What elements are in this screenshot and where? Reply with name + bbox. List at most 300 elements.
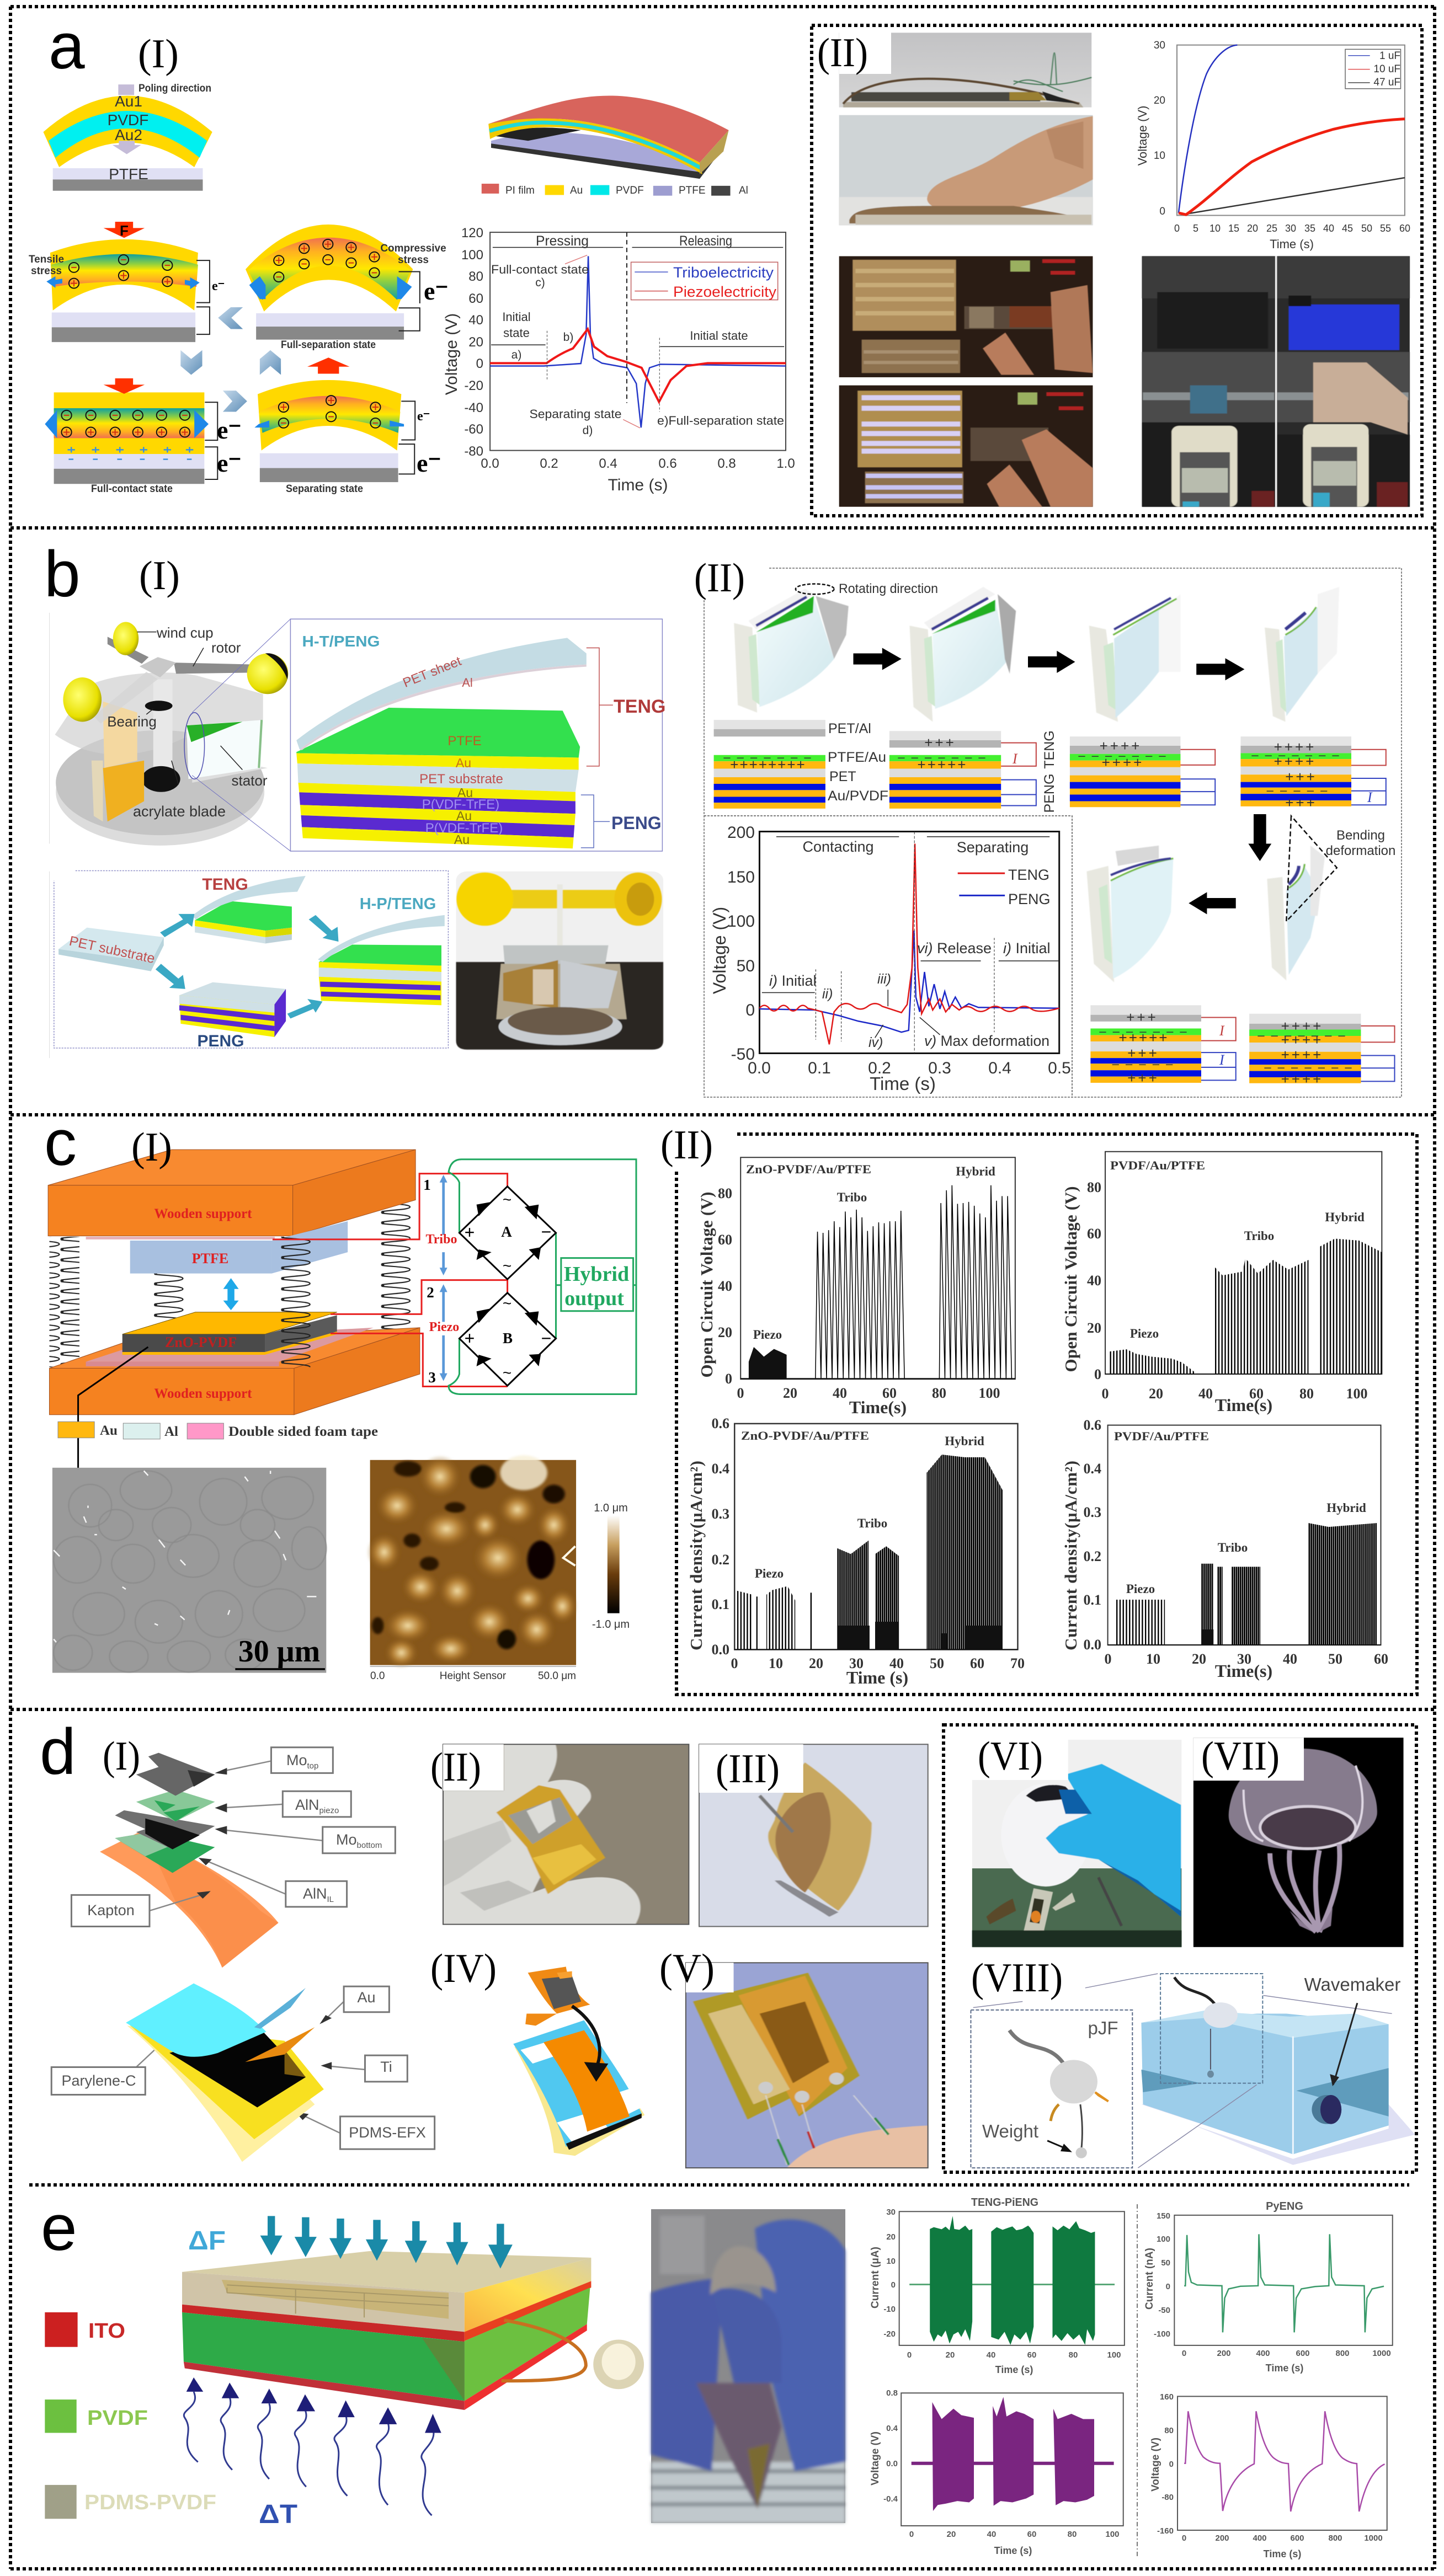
chart: PyENG voltage: 160 (1160, 2392, 1174, 2402)
layer stacks with charge states: +++ (1127, 1070, 1159, 1086)
chart: voltage vs time: Triboelectricity (673, 264, 774, 281)
chart: TENG-PiENG current: Current (μA) (870, 2247, 881, 2308)
chart: TENG-PiENG voltage: 0.8 (886, 2388, 898, 2398)
chart: TENG and PENG voltage: v) Max deformation (924, 1033, 1049, 1049)
layered cube with force and heat arrows: ΔF (188, 2226, 226, 2256)
hybrid device schematic: − (541, 1328, 551, 1348)
chart: PyENG voltage: Time (s) (1264, 2548, 1301, 2559)
chart: open circuit voltage PVDF: 80 (1087, 1179, 1101, 1195)
fabrication flow: TENG (202, 875, 248, 894)
chart: current density ZnO-PVDF: Time (s) (846, 1668, 908, 1687)
photo: arched device (839, 33, 1091, 108)
illustration d(VIII): wave tank and pJF inset: Weight (982, 2121, 1038, 2141)
hybrid device schematic: 3 (428, 1369, 436, 1386)
hybrid device schematic: Wooden support (154, 1206, 252, 1221)
layer stacks with charge states: I (1219, 1052, 1225, 1068)
photo: LEDs on (839, 386, 1093, 507)
hybrid device schematic: output (564, 1287, 624, 1310)
layer stacks with charge states: – – – – – – – (723, 750, 813, 764)
chart: TENG-PiENG voltage: 0 (909, 2530, 914, 2539)
chart: PyENG current: 0 (1182, 2349, 1186, 2358)
layer stack diagram: Au1 (115, 93, 142, 110)
chart: open circuit voltage PVDF: Open Circuit Voltage (V) (1061, 1186, 1080, 1372)
chart: open circuit voltage ZnO-PVDF: ZnO-PVDF/Au/PTFE (746, 1162, 871, 1176)
chart: open circuit voltage PVDF: 0 (1094, 1366, 1101, 1382)
AFM image with colour scale: -1.0 μm (592, 1618, 630, 1631)
hybrid device schematic: Double sided foam tape (228, 1424, 378, 1439)
panel b(II) (694, 555, 1402, 1097)
label: b(II): (II) (694, 555, 745, 601)
chart: TENG-PiENG voltage: -0.4 (883, 2494, 898, 2504)
H-T/PENG zoomed layer stack: P(VDF-TrFE) (425, 821, 503, 836)
wind turbine schematic: wind cup (156, 624, 214, 641)
chart: current density ZnO-PVDF: ZnO-PVDF/Au/PTFE (741, 1429, 869, 1442)
frame of b(II) (704, 568, 1402, 1097)
chart: current density PVDF: Hybrid (1326, 1501, 1366, 1515)
chart: voltage vs time: Initial (502, 310, 531, 324)
layer stacks with charge states: – – – – – – – (1257, 1028, 1347, 1042)
layer stacks with charge states: ++++ (1102, 754, 1144, 771)
AFM image with colour scale: 0.0 (370, 1670, 385, 1682)
exploded AlN layers on Kapton: AlN (303, 1885, 327, 1902)
chart: open circuit voltage PVDF: 60 (1087, 1226, 1101, 1242)
chart: capacitor charging: Voltage (V) (1136, 106, 1149, 165)
chart: open circuit voltage ZnO-PVDF: Time(s) (849, 1397, 907, 1417)
chart: capacitor charging: 1 uF (1379, 50, 1400, 62)
panel d right group (971, 1734, 1415, 2168)
chart: current density ZnO-PVDF: 40 (889, 1655, 904, 1671)
illustration d(IV): patch assembly (430, 1946, 644, 2156)
photo d(V): device on skin: (V) (659, 1946, 715, 1991)
exploded AlN layers on Kapton (51, 1747, 435, 2162)
chart: PyENG current: -50 (1158, 2306, 1170, 2315)
chart: open circuit voltage ZnO-PVDF: Open Circuit Voltage (V) (697, 1191, 716, 1378)
chart: PyENG current: PyENG (1266, 2200, 1303, 2212)
chart: open circuit voltage ZnO-PVDF: 0 (737, 1385, 744, 1401)
chart: current density PVDF: Tribo (1218, 1541, 1248, 1554)
chart: PyENG voltage: 0 (1169, 2460, 1174, 2469)
chart: open circuit voltage ZnO-PVDF: 0 (725, 1371, 732, 1387)
chart: current density PVDF: 40 (1283, 1651, 1297, 1667)
chart: TENG and PENG voltage: i) Initial (769, 972, 817, 989)
hybrid device schematic: ~ (503, 1295, 511, 1312)
fabrication flow (50, 870, 448, 1058)
chart: voltage vs time: 60 (468, 291, 483, 306)
chart: TENG and PENG voltage: 0.2 (868, 1059, 891, 1077)
chart: voltage vs time: -60 (464, 422, 483, 437)
exploded AlN layers on Kapton: bottom (357, 1841, 382, 1850)
chart: current density ZnO-PVDF: 0.1 (712, 1596, 729, 1612)
chart: PyENG current: 150 (1157, 2211, 1170, 2221)
chart: voltage vs time: Separating state (530, 407, 621, 421)
chart: PyENG voltage: 600 (1290, 2534, 1304, 2543)
layer stacks with charge states: I (1012, 751, 1018, 767)
layer stacks with charge states: TENG (1042, 730, 1057, 769)
chart: TENG and PENG voltage: Voltage (V) (710, 907, 729, 994)
exploded AlN layers on Kapton: Ti (380, 2059, 392, 2075)
chart: PyENG current: 50 (1161, 2258, 1170, 2268)
chart: voltage vs time: 0.6 (658, 456, 677, 471)
chart: PyENG voltage: -80 (1161, 2493, 1174, 2502)
H-T/PENG zoomed layer stack: Au (454, 832, 470, 847)
label: d(I): (I) (103, 1734, 140, 1779)
chart: voltage vs time: 80 (468, 269, 483, 284)
chart: open circuit voltage ZnO-PVDF: 20 (718, 1324, 732, 1340)
panel c(II) (660, 1123, 1388, 1687)
AFM image with colour scale: Height Sensor (440, 1670, 507, 1682)
chart: TENG and PENG voltage: 0.0 (748, 1059, 771, 1077)
rotating vane sequence: Bending (1336, 828, 1385, 843)
layer stack diagram: Au2 (115, 126, 142, 143)
hybrid device schematic: Au (100, 1423, 118, 1438)
working cycle diagrams: F (120, 222, 129, 239)
chart: open circuit voltage PVDF: Hybrid (1325, 1210, 1365, 1224)
panel e (41, 2192, 1393, 2559)
illustration d(VIII): wave tank and pJF inset: (VIII) (971, 1955, 1063, 2001)
layer stacks with charge states: – – – – – – – (1099, 1024, 1189, 1038)
chart: PyENG voltage: 400 (1253, 2534, 1267, 2543)
layer stacks with charge states: +++ (1126, 1009, 1158, 1025)
chart: capacitor charging: 40 (1323, 223, 1334, 234)
chart: voltage vs time: b) (563, 331, 573, 344)
chart: TENG-PiENG voltage: 20 (947, 2530, 956, 2539)
chart: open circuit voltage PVDF: 0 (1101, 1386, 1109, 1402)
chart: PyENG current: 0 (1166, 2282, 1170, 2291)
chart: PyENG current: 1000 (1372, 2349, 1391, 2358)
chart: TENG-PiENG voltage: 0.0 (886, 2459, 898, 2468)
chart: TENG-PiENG current: 20 (886, 2232, 896, 2242)
chart: TENG-PiENG voltage: 100 (1105, 2530, 1120, 2539)
photo d(VII): jellyfish (1193, 1734, 1404, 1947)
chart: TENG and PENG voltage: 0.4 (988, 1059, 1011, 1077)
chart: current density ZnO-PVDF: Tribo (857, 1516, 887, 1530)
layer stacks with charge states: – – – – – – – (898, 750, 987, 764)
hybrid device schematic: Piezo (429, 1320, 459, 1334)
chart: TENG-PiENG current: TENG-PiENG (971, 2196, 1038, 2209)
chart: current density ZnO-PVDF: 30 (849, 1655, 864, 1671)
chart: TENG and PENG voltage (704, 816, 1072, 1097)
chart: PyENG current: 600 (1296, 2349, 1310, 2358)
layer stacks with charge states: ++++ (1281, 1032, 1323, 1048)
chart: open circuit voltage ZnO-PVDF: 80 (718, 1185, 732, 1201)
chart: open circuit voltage ZnO-PVDF: Piezo (753, 1328, 782, 1342)
chart: voltage vs time: Initial state (690, 329, 748, 343)
H-T/PENG zoomed layer stack (290, 619, 665, 851)
chart: TENG-PiENG current: 60 (1027, 2350, 1036, 2360)
chart: current density PVDF: 0.0 (1084, 1637, 1101, 1653)
chart: voltage vs time: 120 (461, 226, 483, 241)
label: c(I): (I) (131, 1125, 172, 1170)
working cycle diagrams: Full-contact state (91, 483, 173, 495)
illustration d(VIII): wave tank and pJF inset: Wavemaker (1304, 1974, 1400, 1995)
rotating vane sequence (734, 581, 1395, 982)
photo d(V): device on skin (659, 1946, 928, 2168)
chart: TENG and PENG voltage: TENG (1008, 867, 1049, 883)
chart: TENG and PENG voltage: 100 (727, 912, 755, 931)
H-T/PENG zoomed layer stack: PTFE (447, 734, 482, 749)
chart: open circuit voltage PVDF: Time(s) (1215, 1395, 1272, 1415)
chart: current density PVDF: 0.6 (1084, 1417, 1101, 1433)
working cycle diagrams (29, 222, 449, 495)
chart: TENG-PiENG current: 20 (946, 2350, 955, 2360)
chart: open circuit voltage ZnO-PVDF: Tribo (837, 1190, 867, 1204)
chart: voltage vs time: e)Full-separation state (657, 414, 784, 427)
chart: voltage vs time: Piezoelectricity (673, 284, 777, 300)
photo: turbine prototype (456, 872, 663, 1050)
chart: TENG-PiENG current (870, 2196, 1125, 2375)
hybrid device schematic: Wooden support (154, 1386, 252, 1401)
photo: display panel before and after (1142, 256, 1410, 507)
chart: voltage vs time: 0.8 (717, 456, 736, 471)
layer stacks with charge states: ++++ (1274, 753, 1316, 769)
exploded AlN layers on Kapton: Parylene-C (61, 2072, 136, 2089)
layer stacks with charge states: ++++ (1281, 1018, 1323, 1034)
panel a (29, 10, 795, 495)
label: b(I): (I) (139, 553, 180, 598)
material legend: PVDF (87, 2407, 148, 2430)
chart: TENG-PiENG current: 0 (891, 2280, 896, 2290)
chart: TENG and PENG voltage: 50 (737, 957, 755, 975)
chart: open circuit voltage PVDF: Tribo (1244, 1229, 1274, 1243)
chart: TENG and PENG voltage: 0.5 (1048, 1059, 1071, 1077)
chart: capacitor charging: 10 (1209, 223, 1221, 234)
chart: PyENG voltage: 200 (1215, 2534, 1229, 2543)
chart: TENG and PENG voltage: i) Initial (1003, 940, 1051, 956)
chart: open circuit voltage PVDF: 20 (1149, 1386, 1163, 1402)
chart: PyENG current: 100 (1157, 2235, 1170, 2244)
chart: current density ZnO-PVDF: 0.6 (712, 1415, 729, 1431)
chart: TENG-PiENG current: 30 (886, 2208, 896, 2217)
photo: LEDs off (839, 256, 1093, 377)
wind turbine schematic: rotor (211, 639, 241, 656)
chart: open circuit voltage PVDF: 100 (1346, 1386, 1367, 1402)
working cycle diagrams: stress (398, 254, 429, 266)
chart: open circuit voltage PVDF: 20 (1087, 1320, 1101, 1336)
chart: capacitor charging: 30 (1285, 223, 1296, 234)
illustration d(VIII): wave tank and pJF inset (971, 1955, 1415, 2168)
chart: open circuit voltage ZnO-PVDF: 40 (718, 1278, 732, 1294)
chart: current density PVDF: 0.4 (1084, 1461, 1101, 1477)
chart: current density ZnO-PVDF: 0.4 (712, 1461, 729, 1477)
chart: PyENG current (1144, 2200, 1393, 2374)
3D device with legend: PVDF (616, 185, 644, 196)
hybrid device schematic: ~ (503, 1191, 511, 1208)
layer stacks with charge states: I (1219, 1023, 1225, 1039)
label: a(II): (II) (817, 30, 868, 76)
layer stacks with charge states: – – – – – – – (1264, 1060, 1354, 1074)
chart: current density PVDF: 10 (1146, 1651, 1160, 1667)
layer stacks with charge states: PET/Al (828, 721, 871, 736)
chart: TENG and PENG voltage: vi) Release (917, 940, 992, 956)
fabrication flow: H-P/TENG (360, 895, 436, 913)
chart: open circuit voltage PVDF: 40 (1198, 1386, 1213, 1402)
chart: current density ZnO-PVDF: 0 (731, 1655, 738, 1671)
chart: PyENG voltage: 0 (1182, 2534, 1186, 2543)
chart: open circuit voltage PVDF: Piezo (1130, 1327, 1159, 1340)
chart: TENG-PiENG current: 100 (1107, 2350, 1121, 2360)
H-T/PENG zoomed layer stack: Au (457, 785, 473, 800)
chart: capacitor charging: 0 (1159, 206, 1165, 217)
chart: voltage vs time: 1.0 (776, 456, 795, 471)
layer stacks with charge states: ++++ (1100, 737, 1142, 754)
chart divider (1137, 2204, 1138, 2557)
chart: voltage vs time: 20 (468, 335, 483, 350)
photo d(VI): jellyfish robot held by glove (972, 1734, 1181, 1947)
photo d(VI): jellyfish robot held by glove: (VI) (978, 1734, 1043, 1779)
chart: open circuit voltage PVDF: 60 (1249, 1386, 1264, 1402)
H-T/PENG zoomed layer stack: Au (456, 809, 472, 823)
chart: capacitor charging: 30 (1154, 40, 1165, 51)
working cycle diagrams: e⁻ (417, 449, 441, 477)
chart: voltage vs time: c) (535, 276, 545, 289)
chart: open circuit voltage PVDF: 40 (1087, 1273, 1101, 1289)
working cycle diagrams: e⁻ (217, 449, 242, 477)
chart: voltage vs time: Releasing (679, 233, 732, 249)
chart: TENG and PENG voltage: ii) (822, 986, 833, 1002)
chart: capacitor charging: 5 (1193, 223, 1198, 234)
working cycle diagrams: e⁻ (217, 416, 242, 444)
hybrid device schematic (48, 1150, 636, 1496)
chart: open circuit voltage ZnO-PVDF (697, 1157, 1015, 1417)
layer stacks with charge states: PTFE/Au (828, 750, 886, 765)
layer stacks with charge states: PENG (1042, 774, 1057, 813)
hybrid device schematic: ZnO-PVDF (165, 1334, 237, 1350)
layer stacks with charge states: +++ (1127, 1045, 1159, 1061)
layer stacks with charge states (714, 720, 1394, 1087)
H-T/PENG zoomed layer stack: PENG (611, 813, 662, 833)
working cycle diagrams: e⁻ (417, 409, 430, 424)
material legend: ITO (88, 2320, 125, 2343)
chart: current density ZnO-PVDF: 0.0 (712, 1642, 729, 1658)
photo d(II): flexible device in gloved hand: (II) (430, 1745, 481, 1790)
chart: TENG and PENG voltage: iii) (877, 971, 891, 987)
chart: PyENG current: -100 (1154, 2329, 1170, 2339)
chart: open circuit voltage ZnO-PVDF: 100 (979, 1385, 1000, 1401)
chart: TENG-PiENG current: 10 (886, 2257, 896, 2266)
chart: capacitor charging (1136, 40, 1410, 251)
layer stack diagram: Poling direction (138, 83, 211, 94)
chart: voltage vs time: Full-contact state (491, 263, 589, 276)
AFM image with colour scale: 50.0 μm (538, 1670, 576, 1682)
exploded AlN layers on Kapton: IL (327, 1895, 334, 1904)
chart: PyENG voltage: Voltage (V) (1150, 2438, 1161, 2492)
H-T/PENG zoomed layer stack: Al (462, 676, 473, 690)
layer stacks with charge states: – – – – – (1267, 783, 1329, 797)
chart: capacitor charging: 10 (1154, 150, 1165, 162)
hybrid device schematic: − (541, 1222, 551, 1242)
photo d(III): gold foil with tweezers: (III) (716, 1746, 780, 1792)
chart: current density ZnO-PVDF: 70 (1010, 1655, 1025, 1671)
chart: voltage vs time (443, 226, 795, 494)
chart: capacitor charging: 35 (1304, 223, 1315, 234)
exploded AlN layers on Kapton: Mo (336, 1831, 357, 1848)
chart: capacitor charging: 45 (1342, 223, 1353, 234)
chart: PyENG voltage (1150, 2392, 1387, 2559)
chart: current density ZnO-PVDF: 0.3 (712, 1506, 729, 1522)
chart: voltage vs time: a) (511, 349, 521, 361)
H-T/PENG zoomed layer stack: H-T/PENG (302, 633, 380, 650)
exploded AlN layers on Kapton: Au (357, 1989, 376, 2006)
hybrid device schematic: ~ (503, 1364, 511, 1381)
layer stacks with charge states: – – – – – – – (1251, 748, 1341, 762)
H-T/PENG zoomed layer stack: TENG (614, 696, 665, 717)
chart: voltage vs time: 40 (468, 313, 483, 328)
chart: capacitor charging: Time (s) (1270, 237, 1314, 251)
chart: TENG-PiENG current: 40 (987, 2350, 995, 2360)
chart: TENG-PiENG voltage: 60 (1027, 2530, 1036, 2539)
chart: capacitor charging: 47 uF (1373, 77, 1400, 88)
chart: open circuit voltage ZnO-PVDF: 60 (882, 1385, 897, 1401)
working cycle diagrams: Separating state (286, 483, 363, 495)
chart: PyENG voltage: -160 (1157, 2526, 1174, 2536)
chart: TENG and PENG voltage: iv) (868, 1035, 883, 1050)
heading: b: b (44, 538, 81, 611)
chart: voltage vs time: Time (s) (608, 476, 668, 494)
chart: TENG-PiENG voltage: 0.4 (886, 2424, 898, 2433)
chart: capacitor charging: 15 (1228, 223, 1239, 234)
illustration d(IV): patch assembly: (IV) (430, 1946, 497, 1991)
chart: PyENG current: 800 (1335, 2349, 1350, 2358)
chart: open circuit voltage ZnO-PVDF: 60 (718, 1232, 732, 1248)
layer stacks with charge states: – – – – – – – (1078, 749, 1168, 762)
chart: TENG-PiENG current: 0 (907, 2350, 912, 2360)
chart: TENG and PENG voltage: 0.3 (928, 1059, 951, 1077)
3D device with legend (482, 95, 748, 196)
hybrid device schematic: B (503, 1330, 513, 1346)
chart: current density ZnO-PVDF: Current density(μA/cm²) (686, 1461, 706, 1650)
chart: voltage vs time: state (503, 326, 530, 340)
wind turbine schematic: acrylate blade (133, 803, 226, 820)
chart: TENG and PENG voltage: 150 (727, 868, 755, 886)
hybrid device schematic: Al (164, 1424, 178, 1439)
chart: PyENG current: Current (nA) (1144, 2248, 1155, 2310)
H-T/PENG zoomed layer stack: P(VDF-TrFE) (422, 797, 499, 812)
layer stack diagram (43, 83, 212, 191)
chart: current density ZnO-PVDF: 10 (769, 1655, 783, 1671)
chart: TENG-PiENG current: -10 (883, 2305, 896, 2314)
layered cube with force and heat arrows (182, 2216, 644, 2529)
exploded AlN layers on Kapton: piezo (319, 1806, 339, 1815)
chart: open circuit voltage ZnO-PVDF: 40 (833, 1385, 847, 1401)
chart: capacitor charging: 20 (1247, 223, 1258, 234)
panel b (44, 538, 665, 1058)
H-T/PENG zoomed layer stack: Au (456, 756, 471, 770)
chart: TENG and PENG voltage: 200 (727, 824, 755, 842)
chart: current density PVDF: 0.3 (1084, 1504, 1101, 1520)
chart: current density PVDF: Current density(μA/cm²) (1061, 1461, 1080, 1650)
chart: current density ZnO-PVDF: 50 (930, 1655, 944, 1671)
layer stacks with charge states: Au/PVDF (828, 788, 888, 804)
chart: current density PVDF: 50 (1328, 1651, 1342, 1667)
chart: current density PVDF: 60 (1374, 1651, 1388, 1667)
hybrid device schematic: ~ (503, 1257, 511, 1274)
fabrication flow: PET substrate (68, 933, 156, 966)
wind turbine schematic: Bearing (107, 713, 157, 730)
SEM image (52, 1468, 326, 1673)
chart: TENG and PENG voltage: 0 (745, 1001, 755, 1019)
chart: voltage vs time: 0 (476, 356, 483, 371)
chart: voltage vs time: 100 (461, 248, 483, 263)
layer stacks with charge states: PET (829, 769, 856, 784)
chart: open circuit voltage PVDF (1061, 1152, 1382, 1415)
chart: open circuit voltage PVDF: 80 (1299, 1386, 1314, 1402)
chart: current density ZnO-PVDF: Piezo (755, 1567, 784, 1580)
chart: TENG-PiENG voltage (870, 2388, 1123, 2556)
photo d(III): gold foil with tweezers (699, 1744, 928, 1926)
chart: TENG and PENG voltage: 0.1 (808, 1059, 831, 1077)
layer stacks with charge states: ++++ (1274, 739, 1316, 755)
working cycle diagrams: Full-separation state (281, 339, 376, 351)
